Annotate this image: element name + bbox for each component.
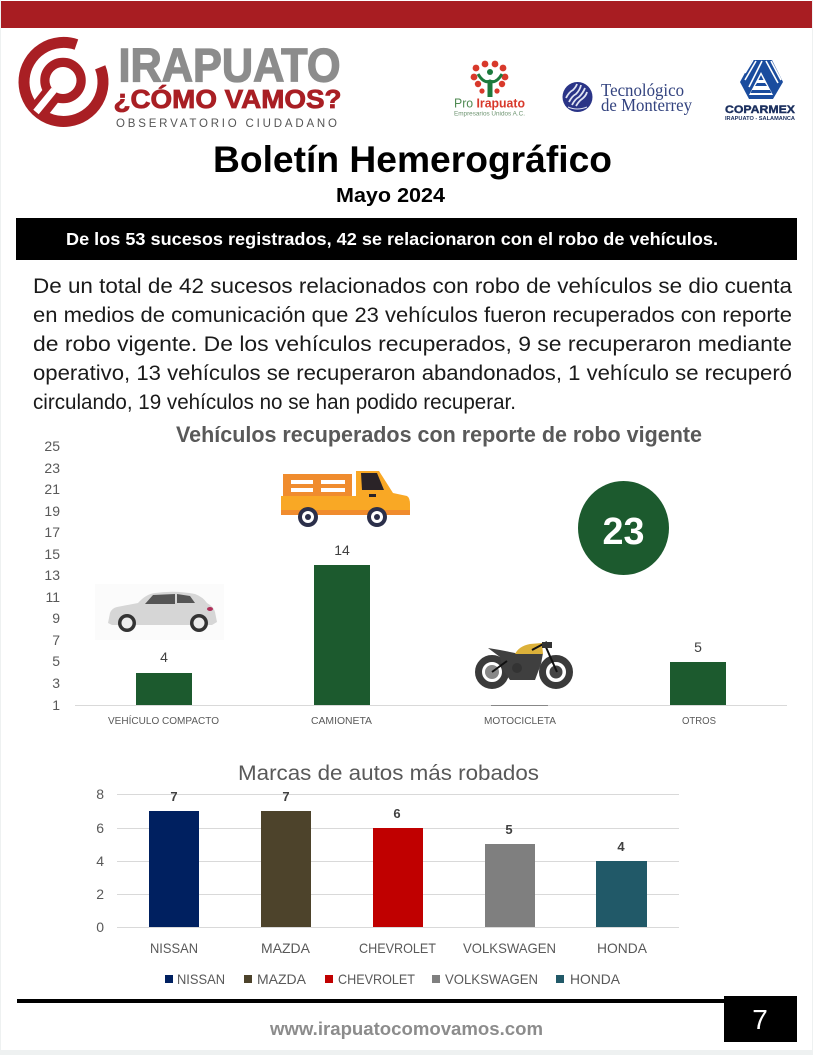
black headline banner: De los 53 sucesos registrados, 42 se relacionaron con el robo de vehículos.	[66, 229, 718, 249]
y axis labels: 11	[45, 589, 60, 605]
logo tagline: OBSERVATORIO CIUDADANO	[116, 118, 337, 130]
category labels: NISSAN	[150, 940, 198, 956]
text: Tecnológico: Tecnológico	[601, 80, 684, 100]
text block: summary paragraph: De un total de 42 sucesos relacionados con robo de vehículos se dio cuenta	[33, 275, 792, 298]
value labels: 6	[393, 806, 401, 821]
legend: MAZDA	[257, 971, 307, 987]
chart heading: Vehículos recuperados con reporte de robo vigente	[176, 422, 702, 447]
icon: motorcycle	[478, 642, 570, 686]
chart heading: Marcas de autos más robados	[238, 762, 539, 785]
page number box	[724, 996, 797, 1042]
text: Irapuato Salamanca: IRAPUATO - SALAMANCA	[725, 116, 795, 122]
title: Boletín Hemerográfico	[213, 139, 612, 180]
logo: COPARMEX	[725, 60, 796, 122]
category labels: HONDA	[597, 940, 648, 956]
bar chart: vehículos recuperados	[44, 422, 787, 727]
callout: total 23	[578, 481, 669, 575]
text block: summary paragraph: circulando, 19 vehículos no se han podido recuperar.	[33, 391, 516, 414]
date subtitle: Mayo 2024	[336, 185, 446, 207]
y axis labels: 8	[96, 786, 104, 802]
page number box: 7	[752, 1004, 768, 1035]
black headline banner	[16, 218, 797, 260]
text: Empresarios Unidos: Empresarios Unidos A.C.	[454, 110, 525, 118]
y axis labels: 2	[96, 886, 104, 902]
icon: car	[95, 584, 224, 640]
value labels: 7	[282, 789, 290, 804]
y axis labels: 19	[44, 503, 60, 519]
bars	[149, 811, 647, 927]
y axis labels: 25	[44, 438, 60, 454]
text block: summary paragraph: operativo, 13 vehículos se recuperaron abandonados, 1 vehículo se recuperó	[33, 362, 792, 385]
value labels: 4	[160, 649, 168, 665]
category labels: MAZDA	[261, 940, 311, 956]
y axis labels: 5	[52, 653, 60, 669]
value labels	[170, 789, 625, 854]
top red band	[1, 1, 812, 28]
logo: Irapuato Cómo Vamos	[24, 38, 341, 130]
value labels: 14	[334, 542, 350, 558]
y axis labels: 17	[44, 524, 60, 540]
y axis labels: 23	[44, 460, 60, 476]
logo wordmark ¿CÓMO VAMOS?: ¿CÓMO VAMOS?	[114, 84, 342, 114]
text block: summary paragraph: de robo vigente. De los vehículos recuperados, 9 se recuperaron mediante	[33, 333, 792, 356]
bars	[136, 565, 726, 706]
icon: Coparmex emblem	[740, 60, 783, 99]
bar chart: marcas de autos más robados	[96, 762, 679, 987]
icon: Tec seal	[562, 82, 592, 112]
category labels: CHEVROLET	[359, 940, 436, 956]
value labels: 5	[505, 822, 513, 837]
category labels: OTROS	[682, 715, 716, 727]
legend: CHEVROLET	[338, 971, 415, 987]
value labels: 7	[170, 789, 178, 804]
icon: truck	[281, 471, 410, 527]
y axis labels: 1	[52, 697, 60, 713]
legend: HONDA	[570, 971, 621, 987]
y axis labels	[44, 438, 60, 713]
icon: magnifier rings	[24, 42, 103, 121]
category labels: VOLKSWAGEN	[463, 940, 556, 956]
legend: VOLKSWAGEN	[445, 971, 538, 987]
y axis labels: 21	[44, 481, 60, 497]
y axis labels: 4	[96, 853, 104, 869]
category labels	[108, 714, 716, 727]
y axis labels: 7	[52, 632, 60, 648]
value labels	[160, 542, 702, 665]
text: Pro Irapuato: Pro Irapuato	[454, 96, 525, 110]
text block: summary paragraph: en medios de comunicación que 23 vehículos fueron recuperados con reporte	[33, 304, 792, 327]
category labels: CAMIONETA	[311, 715, 372, 727]
y axis labels: 6	[96, 820, 104, 836]
legend	[165, 971, 621, 987]
logo wordmark IRAPUATO: IRAPUATO	[118, 38, 340, 92]
y axis labels	[96, 786, 104, 935]
logo: Tecnológico de Monterrey	[562, 80, 692, 115]
icon: Pro Irapuato tree	[471, 61, 508, 97]
value labels: 4	[617, 839, 625, 854]
text: COPARMEX: COPARMEX	[725, 104, 796, 116]
y axis labels: 0	[96, 919, 104, 935]
category labels: VEHÍCULO COMPACTO	[108, 714, 219, 727]
legend: NISSAN	[177, 971, 225, 987]
y axis labels: 9	[52, 610, 60, 626]
text block: summary paragraph	[33, 275, 792, 414]
logo: Pro Irapuato	[454, 61, 525, 118]
y axis labels: 15	[44, 546, 60, 562]
callout: total 23: 23	[602, 511, 644, 553]
value labels: 5	[694, 639, 702, 655]
text: de Monterrey: de Monterrey	[601, 95, 692, 115]
y axis labels: 3	[52, 675, 60, 691]
y axis labels: 13	[44, 567, 60, 583]
category labels	[150, 940, 648, 956]
category labels: MOTOCICLETA	[484, 715, 556, 727]
footer website: www.irapuatocomovamos.com	[269, 1019, 543, 1039]
